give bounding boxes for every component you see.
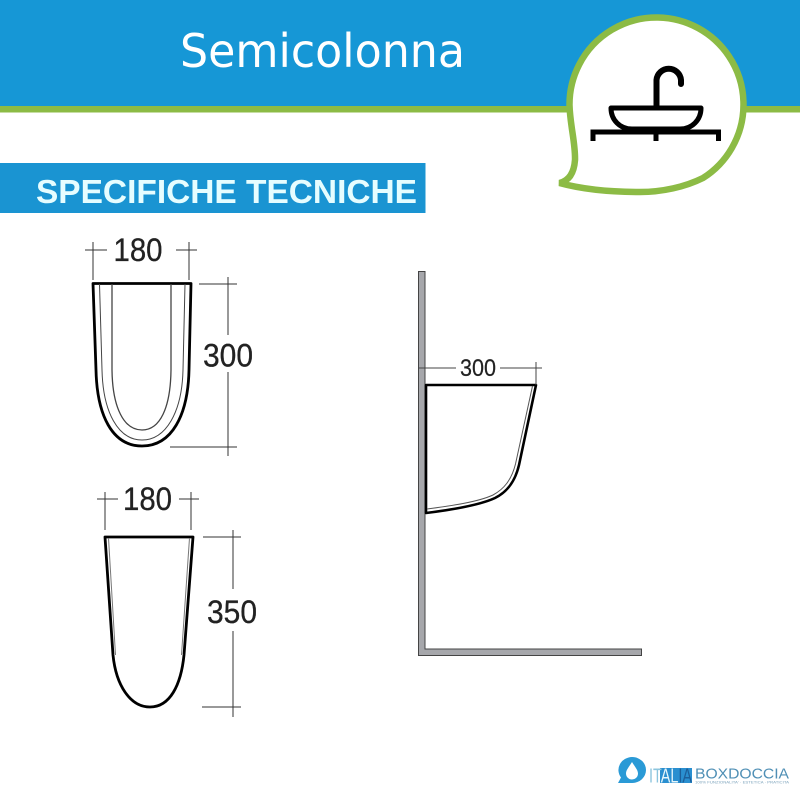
- icon: speech bubble with washbasin: [560, 17, 743, 192]
- section heading: SPECIFICHE TECNICHE: [36, 174, 417, 211]
- wall and floor: [418, 272, 642, 656]
- outline: [93, 284, 191, 446]
- logo: BOXDOCCIA: BOXDOCCIA: [695, 766, 789, 782]
- inner contours: [100, 284, 185, 440]
- technical drawing: side view on wall: [418, 272, 642, 656]
- dimension: 300: 300: [203, 338, 253, 374]
- logo: ITALIA: ITALIA: [649, 766, 692, 788]
- header band: [0, 0, 800, 112]
- dimension: 300: 300: [460, 355, 496, 382]
- logo drop badge: [618, 757, 646, 783]
- technical drawing: semicolonna 300: [85, 232, 253, 456]
- logo: tagline: 100% FUNZIONALITA' · ESTETICA · PRATICITA: [695, 780, 789, 784]
- dimension: 180: 180: [114, 232, 162, 268]
- title: Semicolonna: [180, 24, 465, 78]
- dimension: 350: 350: [207, 594, 257, 630]
- icon: counter: [593, 132, 718, 141]
- technical drawing: semicolonna 350: [97, 481, 257, 717]
- inner contour: [427, 386, 532, 509]
- inner contours: [108, 538, 190, 655]
- logo: Italia Boxdoccia: [618, 757, 789, 788]
- icon: faucet: [656, 69, 681, 107]
- logo wordmark box: [660, 768, 692, 783]
- outline: [105, 537, 193, 707]
- dimension: 180: 180: [123, 481, 172, 517]
- section heading: [0, 163, 426, 213]
- side profile: [426, 385, 536, 513]
- dimension lines: [85, 242, 237, 456]
- dimension lines: [97, 492, 241, 717]
- icon: basin bowl: [611, 108, 701, 129]
- dimension lines: [418, 362, 542, 385]
